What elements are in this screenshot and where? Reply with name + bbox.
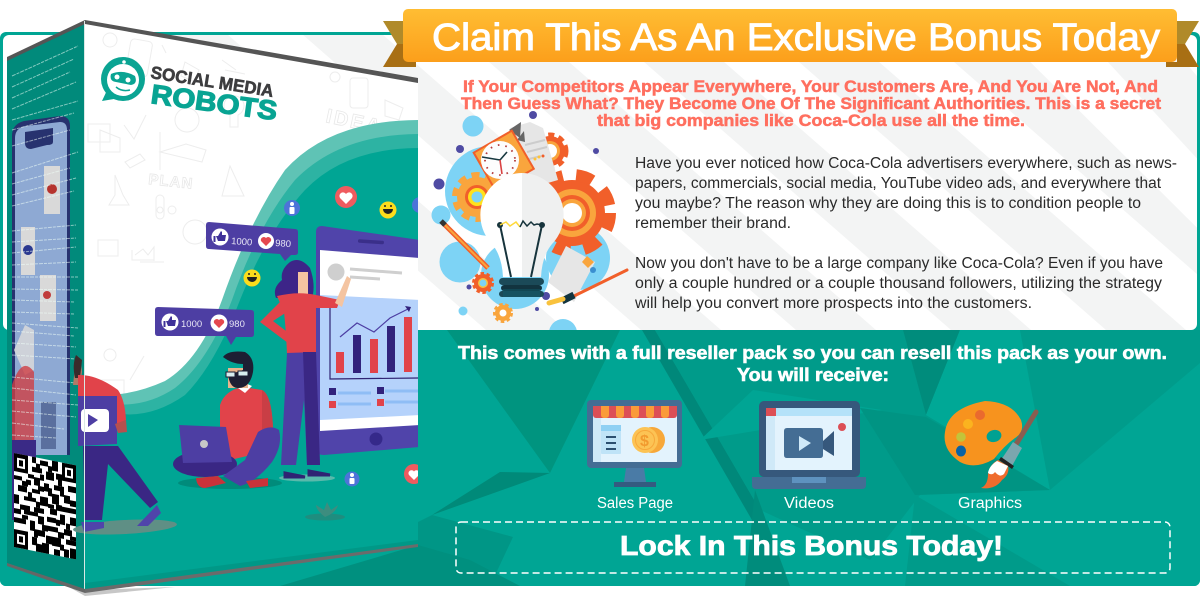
red headline — [461, 78, 1162, 130]
paragraph one: Have you ever noticed how Coca-Cola advertisers everywhere, such as news- — [635, 155, 1177, 172]
icon: paintbrush — [549, 270, 627, 303]
icon: small yellow gear — [494, 304, 512, 322]
icon: top small gear — [546, 132, 568, 169]
reseller heading: You will receive: — [737, 365, 889, 385]
faint doodle background — [88, 33, 403, 398]
reseller heading — [458, 343, 1167, 385]
like bubble upper — [206, 222, 298, 261]
woman presenting — [260, 260, 351, 482]
reaction icons — [244, 186, 428, 486]
label: graphics: Graphics — [958, 495, 1022, 512]
icon: small red gear — [474, 274, 492, 292]
like bubble lower: 1000 — [181, 319, 202, 330]
bar chart — [330, 300, 418, 379]
red headline: If Your Competitors Appear Everywhere, Your Customers Are, And You Are Not, And — [463, 78, 1158, 96]
paragraph two — [634, 255, 1163, 312]
box front face — [85, 20, 428, 600]
icon: clock — [474, 131, 534, 191]
call to action: Lock In This Bonus Today! — [620, 530, 1003, 561]
body text — [634, 155, 1177, 312]
reseller heading: This comes with a full reseller pack so you can resell this pack as your own. — [458, 343, 1167, 363]
doodle words: PLAN — [148, 171, 193, 193]
icon: videos laptop — [752, 401, 866, 489]
box shadow — [60, 582, 175, 596]
logo robot icon — [101, 57, 145, 101]
QR code — [14, 453, 76, 559]
logo wordmark: SOCIAL MEDIA — [149, 62, 275, 101]
box side face — [7, 20, 85, 591]
panel: white content area with diagonal stripes — [3, 34, 1200, 330]
icon: light bulb — [480, 173, 564, 297]
icon: pencil — [441, 221, 488, 268]
title banner — [403, 9, 1177, 62]
paragraph two: only a couple hundred or a couple thousand followers, utilizing the strategy — [635, 275, 1162, 292]
like bubble upper: 1000 — [231, 236, 253, 248]
red headline: Then Guess What? They Become One Of The Significant Authorities. This is a secret — [461, 95, 1162, 113]
ribbon tail left — [383, 21, 416, 67]
like bubble upper: 980 — [275, 238, 291, 250]
icon: sales page monitor: $ — [640, 433, 649, 450]
paragraph one: remember their brand. — [635, 215, 791, 232]
paragraph two: will help you convert more prospects into the customers. — [634, 295, 1032, 312]
logo: Social Media Robots — [101, 57, 279, 126]
call to action — [456, 522, 1170, 573]
product box — [7, 20, 428, 600]
paragraph one: you maybe? The reason why they are doing this is to condition people to — [635, 195, 1141, 212]
side phone mockup — [12, 116, 70, 520]
doodle words — [148, 105, 382, 193]
paragraph two: Now you don't have to be a large company like Coca-Cola? Even if you have — [635, 255, 1163, 272]
icon: left yellow gear — [455, 175, 499, 219]
label: videos: Videos — [784, 495, 834, 512]
man with laptop — [173, 352, 345, 520]
red headline: that big companies like Coca-Cola use all the time. — [597, 112, 1025, 130]
paragraph one: papers, commercials, social media, YouTube video ads, and everywhere that — [635, 175, 1162, 192]
paragraph one — [635, 155, 1177, 232]
panel: low-poly teal lower area — [0, 330, 1200, 586]
logo: Social Media Robots: ROBOTS — [149, 79, 279, 126]
icon: document — [509, 122, 558, 183]
teal hill — [120, 120, 418, 405]
label: sales page: Sales Page — [597, 495, 673, 512]
box edges — [7, 20, 418, 593]
ribbon tail right — [1166, 21, 1199, 67]
illustration: light bulb and gears — [432, 111, 627, 347]
icon: large orange gear — [534, 175, 610, 251]
doodle words: IDEA — [324, 105, 382, 138]
side text lines (illegible in source) — [12, 46, 78, 438]
icon: sticky note — [548, 246, 596, 302]
title: Claim This As An Exclusive Bonus Today — [432, 17, 1160, 59]
like bubble lower: 980 — [229, 319, 245, 330]
icon: sales page monitor — [587, 400, 682, 487]
walking man carrying video box — [73, 355, 177, 537]
chart legend — [329, 387, 418, 408]
icon: graphics palette and brush — [945, 401, 1036, 488]
like bubble lower — [155, 307, 254, 345]
phone dashboard — [316, 226, 420, 455]
box front base shading — [85, 540, 418, 590]
